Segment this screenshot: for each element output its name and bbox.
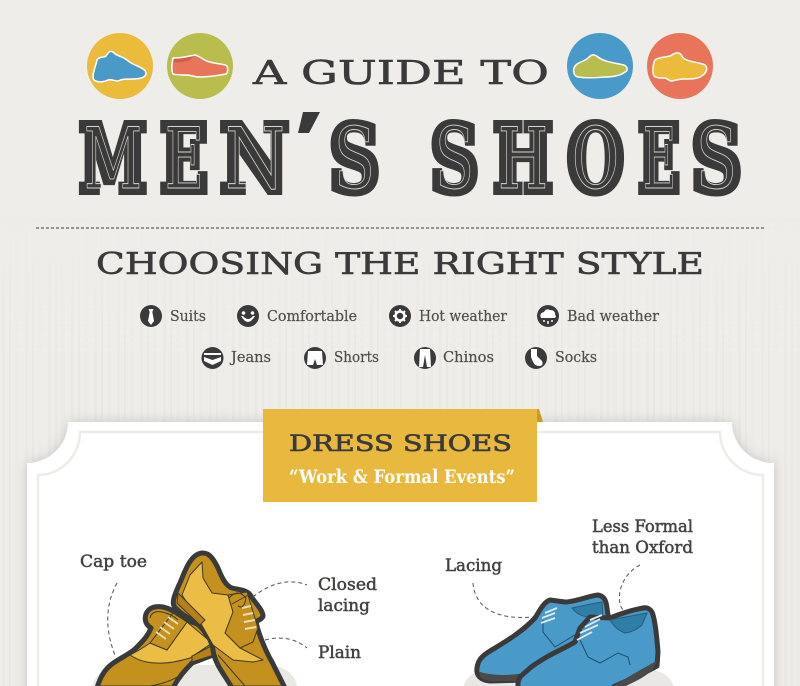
callout: less formal than oxford: Less Formal bbox=[592, 517, 693, 537]
banner: dress shoes: “Work & Formal Events” bbox=[289, 466, 515, 488]
panel: dress shoes card bbox=[27, 409, 774, 686]
legend item: socks: Socks bbox=[555, 350, 597, 366]
title: men's shoes: N bbox=[220, 105, 289, 213]
title: men's shoes: H bbox=[493, 105, 553, 213]
legend item: shorts: Shorts bbox=[334, 350, 379, 366]
legend item: jeans bbox=[202, 347, 271, 369]
legend item: shorts bbox=[304, 347, 379, 369]
legend item: comfortable bbox=[237, 305, 357, 327]
legend item: suits: Suits bbox=[170, 309, 206, 325]
callout: cap toe bbox=[80, 552, 147, 655]
subtitle: a guide to: A GUIDE TO bbox=[252, 53, 549, 92]
floor shadow: yellow shoes bbox=[93, 665, 297, 686]
callout: cap toe: Cap toe bbox=[80, 552, 147, 572]
callout: lacing: Lacing bbox=[445, 556, 502, 576]
title: men's shoes: M bbox=[84, 110, 142, 208]
legend item: comfortable: Comfortable bbox=[267, 309, 357, 325]
legend item: bad weather: Bad weather bbox=[567, 309, 659, 325]
floor shadow: blue shoes bbox=[463, 670, 674, 686]
banner: dress shoes bbox=[263, 409, 543, 502]
title: men's shoes bbox=[79, 105, 742, 213]
legend item: hot weather: Hot weather bbox=[419, 309, 507, 325]
title: men's shoes: E bbox=[643, 110, 676, 208]
title: men's shoes: E bbox=[638, 105, 680, 213]
title: men's shoes: O bbox=[572, 110, 619, 208]
title: men's shoes: S bbox=[435, 110, 474, 208]
banner: dress shoes: DRESS SHOES bbox=[289, 432, 512, 457]
illustration: blue derby shoes bbox=[477, 595, 658, 686]
legend item: hot weather bbox=[389, 305, 507, 327]
title: men's shoes: S bbox=[696, 110, 737, 208]
title: men's shoes: M bbox=[79, 105, 147, 213]
callout: closed lacing: Closed bbox=[318, 575, 377, 595]
title: men's shoes: S bbox=[430, 105, 479, 213]
title: men's shoes: E bbox=[165, 110, 204, 208]
callout: plain bbox=[265, 638, 361, 663]
left shoe bbox=[97, 607, 213, 686]
legend item: socks bbox=[525, 347, 597, 369]
title: men's shoes: N bbox=[225, 110, 285, 208]
legend item: suits bbox=[140, 305, 206, 327]
icon: yellow shoe on red circle bbox=[647, 33, 713, 99]
legend item: jeans: Jeans bbox=[229, 350, 271, 366]
front shoe bbox=[518, 608, 658, 686]
back shoe bbox=[477, 595, 609, 681]
callout: less formal than oxford bbox=[592, 517, 693, 610]
illustration: yellow cap-toe shoes bbox=[97, 553, 285, 686]
callout: closed lacing bbox=[253, 575, 377, 616]
legend item: bad weather bbox=[537, 305, 659, 327]
heading: choosing the right style: CHOOSING THE RIGHT STYLE bbox=[96, 247, 704, 282]
icon: green shoe on blue circle bbox=[567, 33, 633, 99]
legend item: chinos: Chinos bbox=[443, 350, 494, 366]
title: men's shoes: H bbox=[498, 110, 548, 208]
right shoe bbox=[173, 553, 285, 686]
title: men's shoes: S bbox=[329, 105, 380, 213]
legend item: chinos bbox=[414, 347, 494, 369]
legend bbox=[140, 305, 659, 369]
title: men's shoes: O bbox=[567, 105, 624, 213]
icon: red dress shoe on green circle bbox=[167, 33, 233, 99]
icon: blue sneaker on yellow circle bbox=[87, 33, 153, 99]
callout: plain: Plain bbox=[318, 643, 361, 663]
callout: less formal than oxford: than Oxford bbox=[592, 538, 693, 558]
title: men's shoes: E bbox=[160, 105, 208, 213]
callout: lacing bbox=[445, 556, 533, 618]
callout: closed lacing: lacing bbox=[318, 596, 370, 616]
title: men's shoes: S bbox=[691, 105, 742, 213]
title: men's shoes: S bbox=[334, 110, 375, 208]
